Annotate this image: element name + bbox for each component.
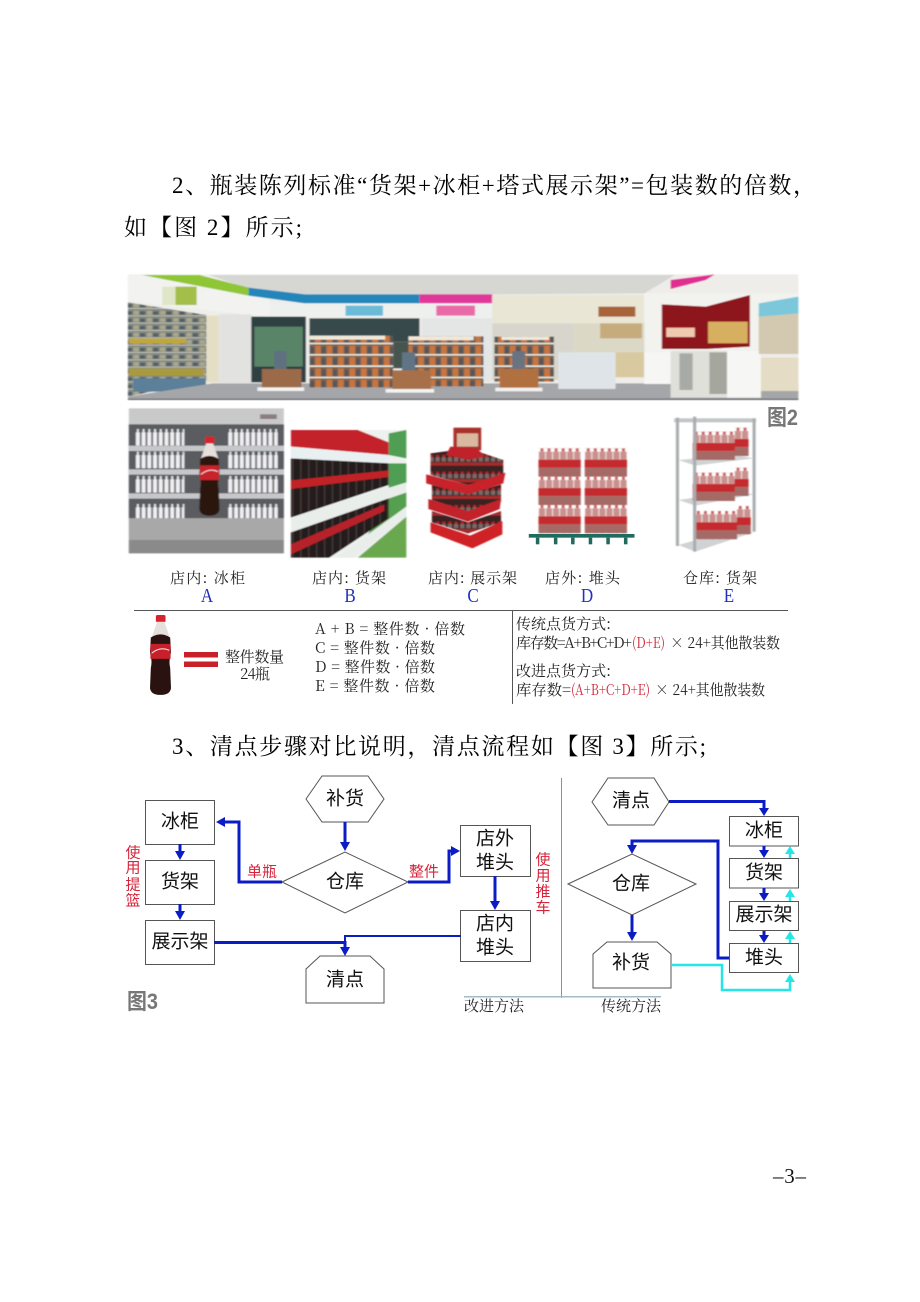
label: 使用提篮: 用 bbox=[125, 860, 141, 876]
text: formula list bbox=[315, 618, 465, 696]
figure label: 图2: 图2 bbox=[767, 405, 798, 430]
text: case quantity bbox=[225, 646, 284, 684]
label: 使用推车: 使 bbox=[535, 852, 551, 868]
node: 店内堆头: 堆头 bbox=[476, 936, 514, 958]
text: improved count method: × 24+其他散装数 bbox=[655, 679, 765, 700]
node: 堆头: 堆头 bbox=[745, 946, 783, 968]
node: 补货: 补货 bbox=[612, 952, 650, 974]
photo B: shelf bbox=[291, 430, 406, 558]
text: case quantity: 整件数量 bbox=[225, 646, 284, 667]
photo C: tower display bbox=[426, 428, 505, 548]
text: traditional count method: 库存数=A+B+C+D+ bbox=[516, 632, 632, 653]
caption: D stack: D bbox=[581, 585, 593, 607]
label: 使用推车 bbox=[535, 852, 551, 916]
node: 冰柜 bbox=[146, 800, 214, 844]
text: formula list: E = 整件数 · 倍数 bbox=[315, 675, 435, 696]
text: improved count method bbox=[516, 660, 765, 700]
text: traditional count method bbox=[516, 613, 780, 653]
caption: D stack: 店外: 堆头 bbox=[545, 567, 621, 588]
caption: A cooler: A bbox=[201, 585, 214, 607]
photo D: pallet stack bbox=[538, 448, 627, 533]
text: improved count method: 库存数= bbox=[516, 679, 571, 700]
caption: B shelf: B bbox=[344, 585, 356, 607]
node: 展示架: 展示架 bbox=[151, 930, 209, 952]
node: 仓库 bbox=[568, 854, 696, 915]
node: 冰柜: 冰柜 bbox=[745, 820, 783, 842]
label: 使用提篮 bbox=[125, 844, 141, 910]
text: formula list: D = 整件数 · 倍数 bbox=[315, 656, 435, 677]
node: 清点: 清点 bbox=[612, 790, 650, 812]
node: 补货: 补货 bbox=[326, 788, 364, 810]
node: 店外堆头: 堆头 bbox=[476, 852, 514, 874]
node: 店外堆头 bbox=[460, 826, 530, 876]
node: 冰柜: 冰柜 bbox=[161, 810, 199, 832]
photo E: warehouse rack bbox=[674, 417, 756, 552]
text: traditional count method: 传统点货方式: bbox=[516, 613, 611, 634]
node: 店外堆头: 店外 bbox=[476, 828, 514, 850]
node: 冰柜 bbox=[730, 816, 798, 846]
node: 补货 bbox=[306, 776, 384, 822]
caption: E warehouse: E bbox=[724, 585, 734, 607]
text: formula list: A + B = 整件数 · 倍数 bbox=[315, 618, 465, 639]
text: formula list: C = 整件数 · 倍数 bbox=[315, 637, 435, 658]
text: case quantity: 24瓶 bbox=[240, 663, 270, 684]
caption: C display: C bbox=[467, 585, 479, 607]
caption: C display: 店内: 展示架 bbox=[428, 567, 517, 588]
product photos row bbox=[129, 408, 756, 558]
caption: B shelf bbox=[312, 567, 386, 607]
heading: paragraph 3: 3、清点步骤对比说明，清点流程如【图 3】所示; bbox=[172, 734, 706, 760]
store interior photo bbox=[128, 274, 798, 400]
node: 店内堆头 bbox=[460, 910, 530, 962]
caption: D stack bbox=[545, 567, 621, 607]
caption: B shelf: 店内: 货架 bbox=[312, 567, 386, 588]
label: 使用推车: 车 bbox=[535, 900, 551, 916]
text: traditional count method: × 24+其他散装数 bbox=[670, 632, 780, 653]
caption: A cooler bbox=[170, 567, 245, 607]
caption: A cooler: 店内: 冰柜 bbox=[170, 567, 245, 588]
node: 清点: 清点 bbox=[326, 968, 364, 990]
text: traditional count method: (D+E) bbox=[632, 632, 665, 653]
figure label: 图3: 图3 bbox=[127, 989, 158, 1014]
arrows: traditional flow bbox=[627, 802, 795, 990]
node: 堆头 bbox=[730, 944, 798, 972]
page number: –3– bbox=[772, 1164, 806, 1188]
label: 传统方法: 传统方法 bbox=[601, 995, 662, 1016]
label: 使用提篮: 使 bbox=[125, 844, 141, 862]
node: 货架 bbox=[730, 858, 798, 888]
heading: paragraph 2: 2、瓶装陈列标准“货架+冰柜+塔式展示架”=包装数的倍数， bbox=[172, 173, 816, 199]
heading: paragraph 2: 如【图 2】所示; bbox=[124, 215, 302, 240]
node: 仓库: 仓库 bbox=[326, 870, 364, 892]
node: 展示架 bbox=[146, 920, 214, 964]
node: 货架: 货架 bbox=[161, 870, 199, 892]
label: 改进方法: 改进方法 bbox=[464, 995, 525, 1016]
label: 使用推车: 推 bbox=[535, 884, 551, 900]
arrows: improved flow bbox=[175, 817, 500, 956]
caption: C display bbox=[428, 567, 517, 607]
label: 使用提篮: 篮 bbox=[125, 892, 141, 910]
label: 使用推车: 用 bbox=[535, 868, 551, 884]
heading: paragraph 2 bbox=[124, 173, 816, 240]
caption: E warehouse bbox=[683, 567, 757, 607]
node: 仓库: 仓库 bbox=[612, 872, 650, 894]
flowchart: traditional method bbox=[568, 778, 798, 990]
photo A: cooler bbox=[129, 408, 284, 553]
node: 店内堆头: 店内 bbox=[476, 912, 514, 934]
node: 货架: 货架 bbox=[745, 862, 783, 884]
node: 补货 bbox=[593, 942, 671, 988]
node: 仓库 bbox=[282, 852, 408, 913]
label: 使用提篮: 提 bbox=[125, 876, 141, 894]
node: 清点 bbox=[592, 778, 669, 825]
node: 清点 bbox=[306, 956, 384, 1003]
flowchart: improved method bbox=[125, 776, 551, 1003]
icon: coke bottle with equals sign bbox=[150, 615, 218, 695]
node: 展示架 bbox=[730, 902, 798, 930]
node: 货架 bbox=[146, 860, 214, 904]
node: 展示架: 展示架 bbox=[735, 904, 793, 926]
text: improved count method: 改进点货方式: bbox=[516, 660, 611, 681]
label: 整件: 整件 bbox=[409, 864, 439, 880]
caption: E warehouse: 仓库: 货架 bbox=[683, 567, 757, 588]
text: improved count method: (A+B+C+D+E) bbox=[571, 679, 650, 700]
label: 单瓶: 单瓶 bbox=[247, 864, 277, 880]
